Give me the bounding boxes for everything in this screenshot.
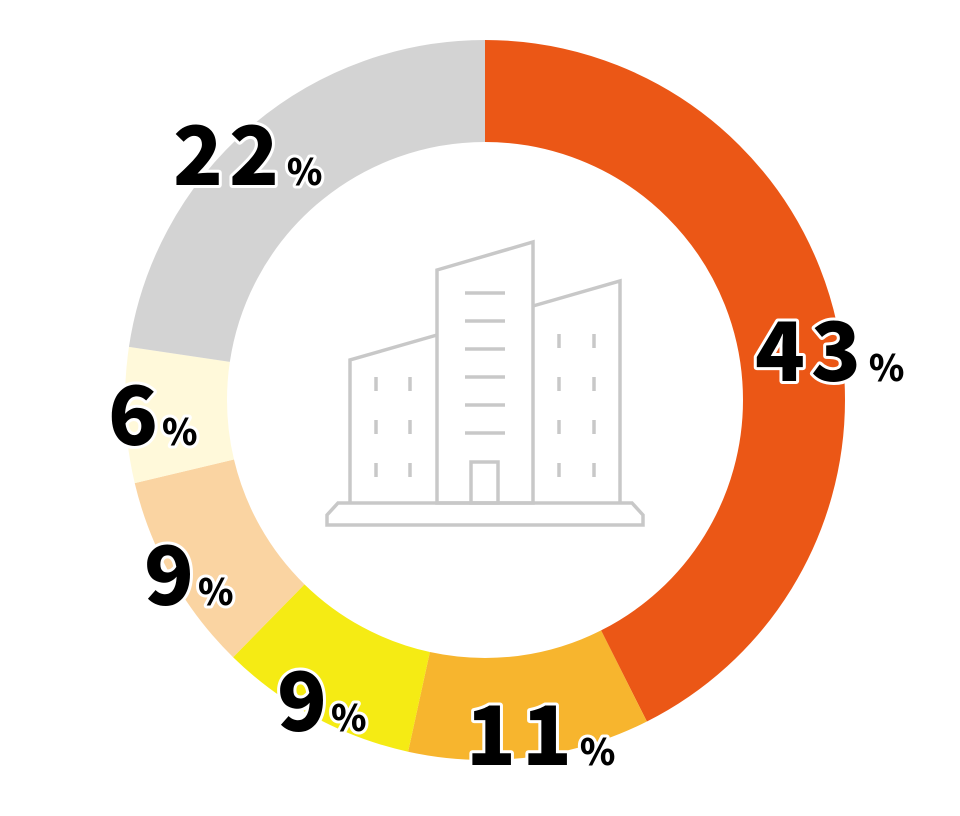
label: 11%: 11% [466,670,615,789]
label: 9% yellow: 9% [277,636,366,755]
label: 6%: 6% [108,350,197,469]
label: 22%: 22% [173,90,322,209]
donut chart [176,91,794,709]
label: 9% peach: 9% [144,510,233,629]
label: 43%: 43% [755,286,904,405]
icon: building [327,242,643,525]
